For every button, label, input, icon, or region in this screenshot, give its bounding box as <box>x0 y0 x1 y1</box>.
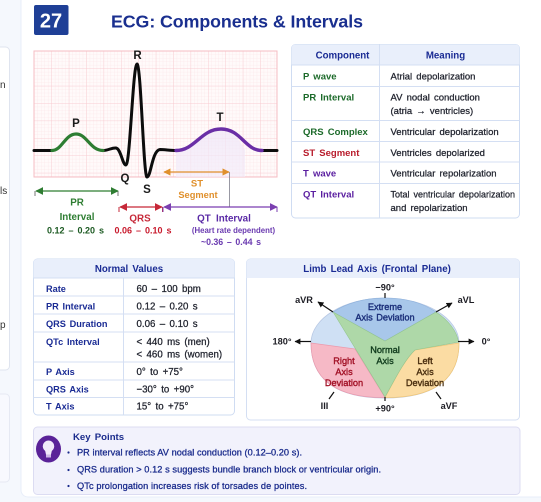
row: QT interval: Total ventricular depolarization <box>390 190 515 200</box>
QRS annotation <box>114 207 172 236</box>
row: QT interval: QT Interval <box>303 190 354 200</box>
ST segment annotation: Segment <box>178 190 218 200</box>
row: QRS complex: Ventricular depolarization <box>390 127 499 138</box>
QRS annotation: 0.06 – 0.10 s <box>114 226 172 236</box>
row: QRS duration: 0.06 – 0.10 s <box>136 319 198 330</box>
row: P axis <box>46 367 183 378</box>
row: T axis <box>46 402 188 412</box>
key point 2: QRS duration > 0.12 s suggests bundle branch block or ventricular origin. <box>77 464 381 474</box>
table header: Meaning <box>426 50 465 62</box>
axis labels: aVR <box>295 295 313 305</box>
axis labels: 180° <box>272 336 292 346</box>
axis labels <box>272 282 491 414</box>
key points heading: Key Points <box>73 432 124 443</box>
zone labels: Deviation <box>325 378 363 388</box>
limb lead heading <box>246 259 520 278</box>
zone: right axis deviation <box>311 343 385 398</box>
panel: component table <box>292 44 520 218</box>
table header <box>292 44 520 65</box>
table header: Component <box>316 50 370 62</box>
row: QRS axis: QRS Axis <box>46 384 89 394</box>
row: QRS duration: QRS Duration <box>46 319 108 329</box>
sidebar: cropped neighbouring panels <box>0 47 10 482</box>
axis labels: aVL <box>458 295 475 305</box>
key point 3: QTc prolongation increases risk of torsades de pointes. <box>77 481 307 491</box>
axis oval diagram <box>311 298 459 398</box>
axis labels: aVF <box>441 401 458 411</box>
PR interval annotation <box>35 191 118 236</box>
row: QRS complex: QRS Complex <box>303 127 369 138</box>
row: PR interval: (atria → ventricles) <box>390 106 473 117</box>
wave label: P: P <box>72 118 80 130</box>
zone: extreme axis deviation <box>333 298 436 341</box>
row: PR interval: 0.12 – 0.20 s <box>136 302 198 312</box>
row: QTc interval: QTc Interval <box>46 337 100 347</box>
axis labels: −90° <box>375 282 395 292</box>
row: QT interval <box>303 190 515 214</box>
row: T wave: Ventricular repolarization <box>390 168 497 180</box>
QT interval annotation: ~0.36 – 0.44 s <box>201 237 261 247</box>
zone labels <box>325 302 444 388</box>
row: PR interval: AV nodal conduction <box>390 92 480 104</box>
row: PR interval: PR Interval <box>303 92 354 104</box>
row: T axis: 15° to +75° <box>136 402 188 412</box>
limb lead heading: Limb Lead Axis (Frontal Plane) <box>303 264 451 275</box>
ECG trace <box>34 64 277 177</box>
icon: light bulb <box>36 436 61 462</box>
wave label: T: T <box>216 112 224 124</box>
sidebar: cropped neighbouring panels: n <box>0 80 6 91</box>
key point 1: PR interval reflects AV nodal conduction (0.12–0.20 s). <box>77 448 302 458</box>
zone labels: Axis <box>376 356 394 366</box>
axis labels: 0° <box>482 336 491 346</box>
PR interval annotation: Interval <box>60 212 95 223</box>
QT interval annotation <box>163 207 277 247</box>
QRS annotation: QRS <box>129 214 151 224</box>
row: QTc interval <box>46 337 222 360</box>
row: PR interval <box>303 92 480 117</box>
zone labels: Left <box>417 356 433 366</box>
zone labels: Axis <box>416 367 434 377</box>
sidebar: cropped neighbouring panels: ls <box>0 186 7 197</box>
title badge: 27 <box>40 10 62 32</box>
row: T wave: T wave <box>303 168 336 180</box>
row: ST segment: Ventricles depolarized <box>390 148 485 159</box>
axis labels: +90° <box>375 404 395 414</box>
row: QRS complex <box>303 127 499 138</box>
ST segment annotation: ST <box>191 178 203 190</box>
row: rate <box>46 284 201 295</box>
panel: limb lead axis <box>246 259 520 420</box>
normal values heading <box>34 259 234 278</box>
sidebar: cropped neighbouring panels: p <box>0 320 6 331</box>
QT interval annotation: (Heart rate dependent) <box>192 226 275 235</box>
PR interval annotation: 0.12 – 0.20 s <box>47 226 104 236</box>
row: rate: 60 – 100 bpm <box>136 284 201 295</box>
wave label: R: R <box>133 50 142 62</box>
normal values heading: Normal Values <box>95 264 163 275</box>
row: QRS axis <box>46 384 194 396</box>
zone labels: Deviation <box>406 378 444 388</box>
row: QTc interval: < 460 ms (women) <box>136 350 222 360</box>
wave label: Q: Q <box>121 173 130 185</box>
zone labels: Axis Deviation <box>355 312 415 322</box>
zone labels: Normal <box>370 345 400 355</box>
zone labels: Axis <box>335 367 353 377</box>
zone labels: Extreme <box>368 302 402 312</box>
ECG waveform chart <box>34 50 277 196</box>
QT interval annotation: QT Interval <box>197 214 251 224</box>
row: T axis: T Axis <box>46 402 74 412</box>
panel: normal values <box>34 259 234 415</box>
row: QRS duration <box>46 319 198 330</box>
row: P wave <box>303 72 475 82</box>
axis arrows and ticks <box>295 293 474 401</box>
ECG grid paper <box>34 51 277 177</box>
row: P wave: P wave <box>303 72 337 82</box>
row: PR interval: PR Interval <box>46 302 95 312</box>
title: ECG: Components & Intervals <box>111 12 363 32</box>
row: ST segment <box>303 148 485 159</box>
T wave shading <box>176 131 245 177</box>
row: QTc interval: < 440 ms (men) <box>136 337 210 348</box>
panel: key points <box>34 427 520 494</box>
row: P axis: 0° to +75° <box>136 367 183 378</box>
row: ST segment: ST Segment <box>303 148 360 159</box>
title badge <box>34 5 68 35</box>
row: rate: Rate <box>46 284 66 294</box>
zone: left axis deviation <box>385 343 459 398</box>
row: QRS axis: −30° to +90° <box>136 384 194 396</box>
row: P axis: P Axis <box>46 367 75 377</box>
wave label: S: S <box>143 184 151 196</box>
row: P wave: Atrial depolarization <box>390 72 475 82</box>
row: PR interval <box>46 302 198 312</box>
row: T wave <box>303 168 497 180</box>
axis labels: III <box>321 401 328 411</box>
zone: normal axis <box>333 312 458 397</box>
zone labels: Right <box>333 356 355 366</box>
PR interval annotation: PR <box>70 198 84 208</box>
ST segment annotation <box>164 172 230 207</box>
row: QT interval: and repolarization <box>390 203 468 214</box>
